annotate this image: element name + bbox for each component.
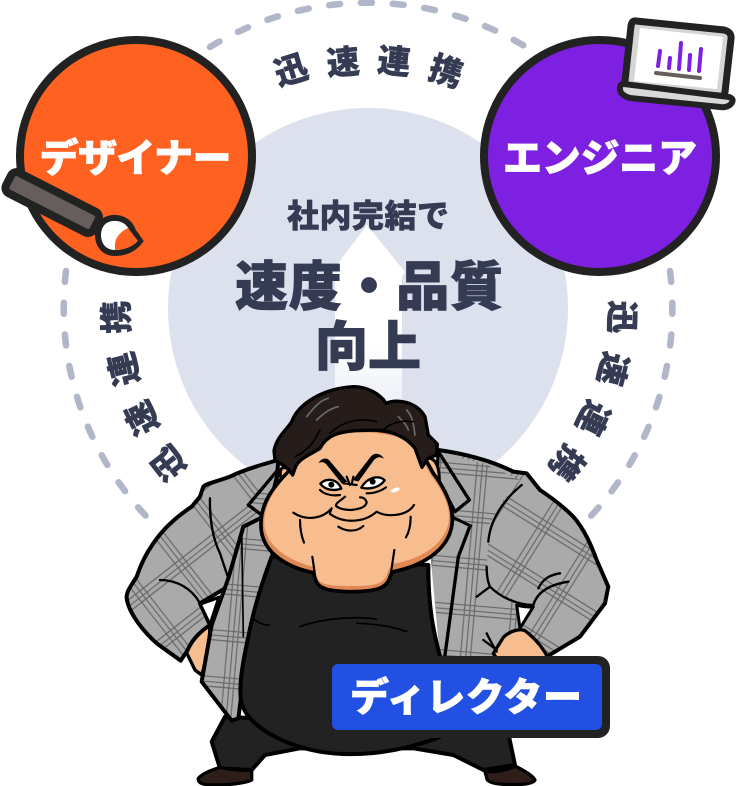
designer label: デザイナー [40,137,232,181]
headline line 2: 向上 [315,318,421,377]
left sleeve [127,460,278,661]
right collar [437,452,469,512]
dashed cycle ring [64,3,672,530]
cycle label: left [97,300,193,487]
director label text: ディレクター [350,676,582,720]
right sleeve [427,450,608,657]
hair [274,387,437,475]
cycle label: right: 連 [569,395,616,441]
right hand [493,630,548,658]
cycle label: top: 速 [325,43,361,82]
left jacket panel [202,513,273,721]
cycle label: right [542,300,641,487]
left eye [320,480,341,490]
right sleeve outline [438,450,608,657]
cycle label: top [270,41,467,94]
director label [320,656,610,738]
background circle [168,108,568,508]
belly folds [253,618,407,632]
icon: paint brush [3,170,140,253]
engineer circle [484,21,733,272]
right eye [361,477,385,488]
right arm gap [517,605,533,628]
character: director [127,387,608,785]
designer circle [3,40,252,272]
black shirt [240,557,483,754]
upward arrow [331,225,405,420]
pants [212,717,515,770]
cycle label: top: 携 [424,49,467,94]
cycle label: right: 速 [591,348,634,389]
right jacket panel [427,454,520,657]
cheek highlight [390,487,400,493]
right lapel edge [452,517,471,526]
cycle label: top: 迅 [270,48,312,93]
cycle label: right: 迅 [602,300,641,334]
cycle label: left: 連 [103,348,146,389]
headline line 1: 速度・品質 [235,258,503,317]
icon: laptop with chart [620,21,733,107]
face [261,429,452,592]
cycle label: right: 携 [542,438,591,487]
right ear [425,458,439,480]
right shoe [485,766,535,785]
face lines [293,477,414,575]
left arm gap [200,597,219,625]
eyebrows [318,458,347,483]
left hand [186,626,210,675]
cycle label: top: 連 [376,41,412,82]
jacket creases [160,485,568,655]
lead text: 社内完結で [287,198,449,234]
left collar [248,469,278,515]
cycle label: left: 速 [119,395,166,441]
hair highlights [307,398,415,435]
left ear [280,468,293,484]
center message [235,198,503,377]
engineer label: エンジニア [503,138,697,181]
left shoe [198,767,252,785]
cycle label: left: 携 [97,300,136,334]
cycle label: left: 迅 [144,438,193,487]
